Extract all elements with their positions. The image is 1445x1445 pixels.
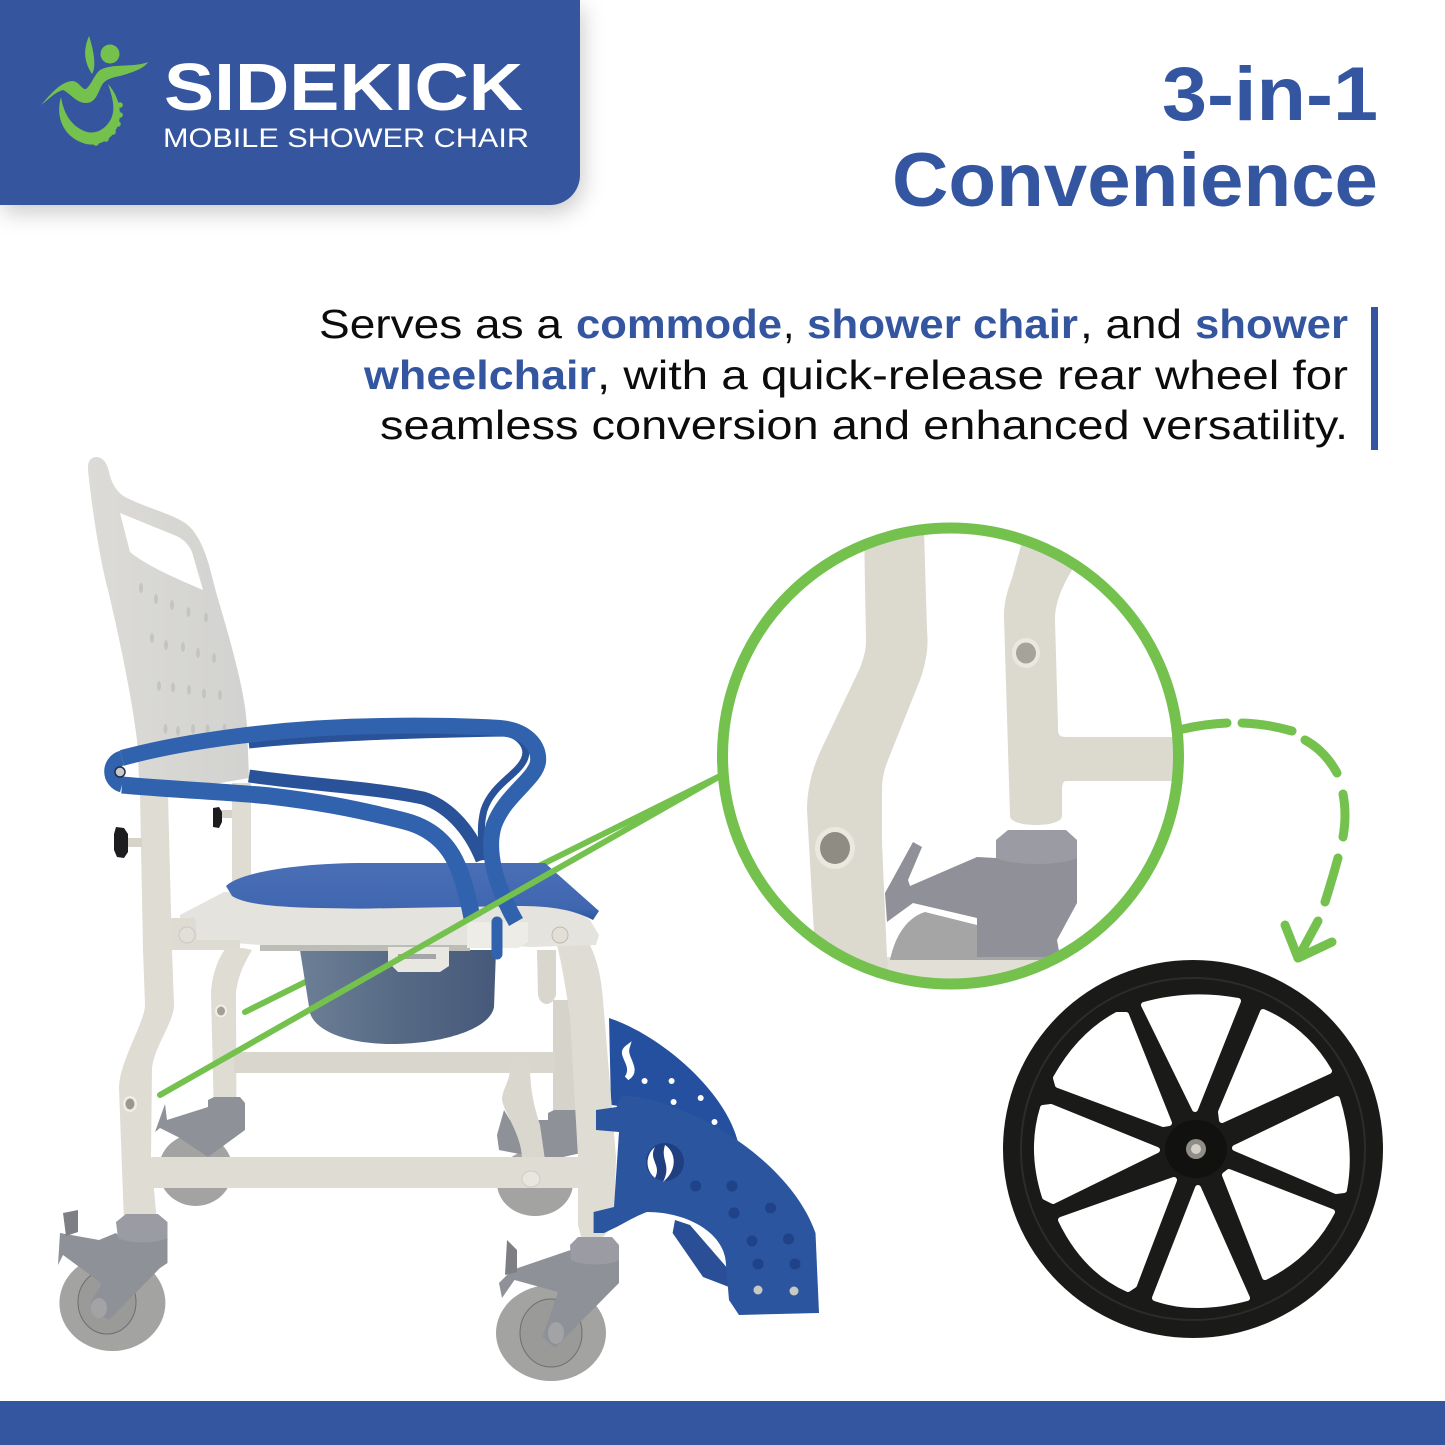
blue seat pad xyxy=(226,863,599,920)
close-up caster bracket xyxy=(885,830,1077,957)
backrest xyxy=(88,457,249,797)
wheel hub xyxy=(1165,1120,1227,1178)
arrow: dashed curve from circle to wheel xyxy=(1183,723,1345,958)
chair frame tubes xyxy=(119,783,616,1240)
close-up frame hole left xyxy=(815,827,855,869)
description text: seamless conversion and enhanced versatility. xyxy=(380,402,1348,448)
description text: Serves as a xyxy=(319,301,562,347)
description text: shower chair xyxy=(807,301,1078,347)
description text: , and xyxy=(1080,301,1182,347)
front caster right xyxy=(496,1237,619,1381)
brand name: SIDEKICK xyxy=(164,50,523,125)
description text: commode xyxy=(576,301,782,347)
description text: shower xyxy=(1195,301,1348,347)
description text: , with a quick-release rear wheel for xyxy=(597,352,1348,398)
title: 3-in-1 xyxy=(1162,52,1378,137)
rear caster left xyxy=(155,1097,245,1206)
description text: , xyxy=(783,301,794,347)
close-up bottom rail xyxy=(887,957,1039,978)
description text: wheelchair xyxy=(363,352,596,398)
blue armrest xyxy=(112,726,538,954)
bottom bar xyxy=(0,1401,1445,1445)
rear wheel xyxy=(1003,960,1383,1338)
title xyxy=(892,52,1378,223)
header panel xyxy=(0,0,580,205)
close-up left tube xyxy=(807,530,928,1000)
brand subtitle: MOBILE SHOWER CHAIR xyxy=(163,123,529,153)
description text xyxy=(319,301,1348,448)
front caster left xyxy=(58,1210,168,1351)
close-up frame hole right xyxy=(1012,638,1040,668)
height adjustment knobs xyxy=(114,807,232,858)
rear footrest xyxy=(563,1013,738,1142)
close-up wheel xyxy=(890,912,1062,960)
front footrest xyxy=(594,1095,819,1315)
callout line over chair xyxy=(160,775,722,1095)
rear caster right xyxy=(497,1110,581,1216)
seat tray xyxy=(170,892,599,972)
accent bar xyxy=(1371,307,1378,450)
close-up right tube xyxy=(1004,545,1173,825)
icon: Sidekick logo xyxy=(41,36,148,146)
callout line behind chair xyxy=(245,775,722,1012)
commode bucket xyxy=(300,950,496,1044)
shower chair photo xyxy=(58,457,819,1381)
rear armrest bars xyxy=(249,733,526,860)
detail circle: wheel mount close-up xyxy=(722,520,1180,1000)
title: Convenience xyxy=(892,138,1378,223)
footrest strap xyxy=(673,1220,729,1287)
